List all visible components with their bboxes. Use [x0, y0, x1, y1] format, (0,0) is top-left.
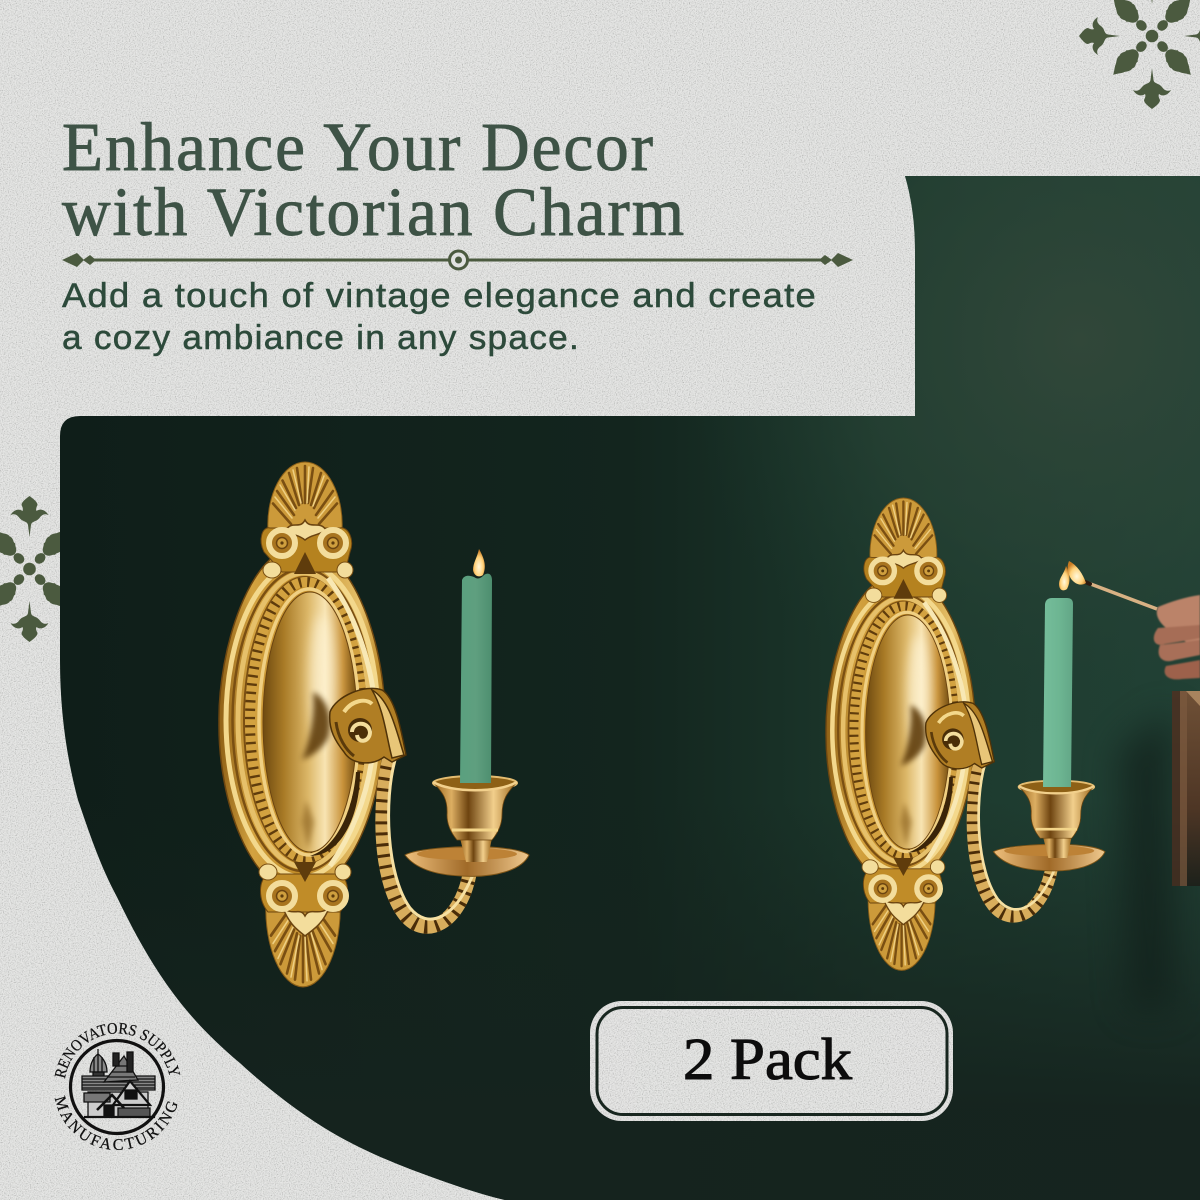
sconce: right, being lit [826, 498, 1105, 970]
logo: Renovators Supply Manufacturing [54, 1022, 180, 1150]
badge: 2 Pack: 2 Pack [683, 1026, 853, 1092]
sconce: left, lit candle [219, 462, 529, 987]
subtitle: a cozy ambiance in any space. [62, 319, 580, 357]
logo: Renovators Supply Manufacturing: RENOVATORS SUPPLY [54, 1022, 180, 1079]
matchstick [1068, 561, 1157, 609]
ornament: top right floral motif [1079, 0, 1200, 109]
subtitle [62, 277, 817, 357]
flame: left candle [473, 549, 485, 576]
furniture shadow [1120, 710, 1172, 1010]
logo: Renovators Supply Manufacturing: MANUFACTURING [54, 1095, 178, 1150]
icon: Victorian house [82, 1049, 155, 1117]
decorative divider [62, 251, 853, 269]
candle: left [460, 574, 492, 783]
candle: right [1043, 598, 1073, 787]
hand holding match [1154, 595, 1200, 679]
subtitle: Add a touch of vintage elegance and create [62, 277, 817, 315]
title: with Victorian Charm [62, 174, 686, 250]
flame: right candle [1059, 566, 1070, 590]
badge: 2 Pack [590, 1001, 953, 1121]
title: Enhance Your Decor [62, 109, 655, 185]
wooden furniture edge [1172, 691, 1200, 886]
title [62, 109, 686, 250]
ornament: left floral motif [0, 496, 102, 642]
